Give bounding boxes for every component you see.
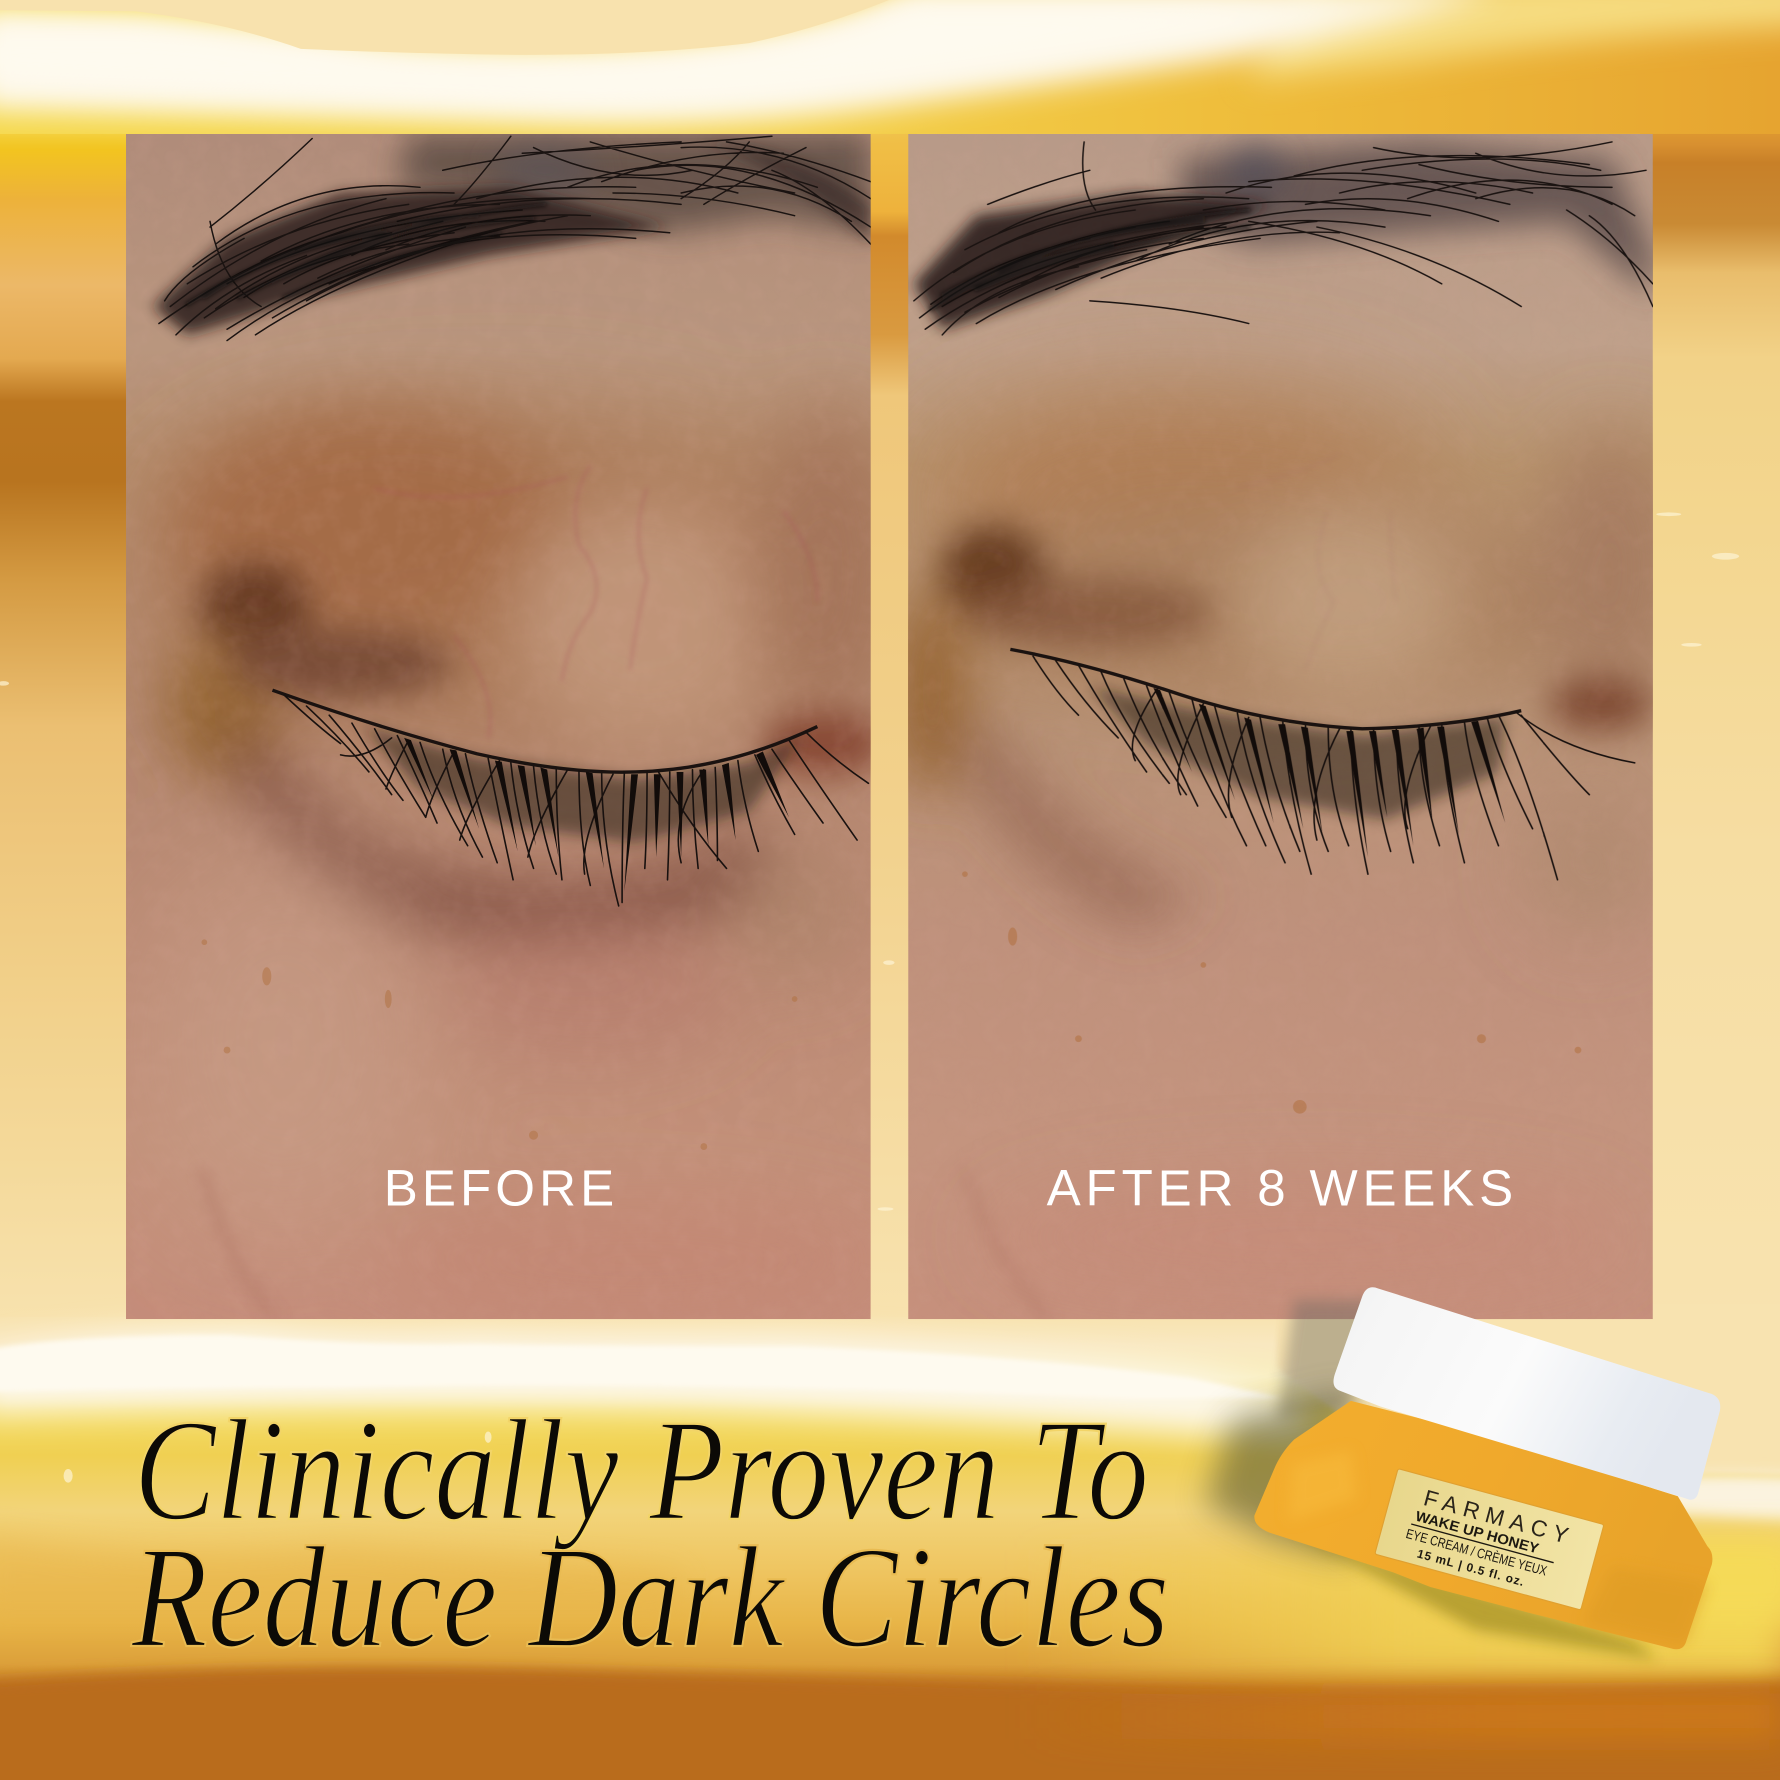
jar body [1254, 1401, 1712, 1649]
jar lid [1333, 1287, 1720, 1500]
film grain [908, 134, 1653, 1319]
film grain [183, 516, 411, 726]
eyebrow [153, 134, 871, 341]
product jar [1254, 1287, 1720, 1649]
skin tone [891, 397, 1680, 1294]
jar label: 15 mL | 0.5 fl. oz. [1416, 1547, 1525, 1589]
before photo panel [126, 134, 897, 1319]
after label: AFTER 8 WEEKS [1047, 1160, 1513, 1217]
before label: BEFORE [384, 1160, 614, 1217]
eyelashes [1010, 649, 1635, 880]
skin tone [132, 364, 871, 1148]
jar label: EYE CREAM / CRÈME YEUX [1404, 1526, 1549, 1579]
title [131, 1391, 1169, 1678]
cheek crease [1038, 1319, 1050, 1320]
jar label: FARMACY [1421, 1484, 1571, 1548]
eyelashes [272, 690, 868, 906]
after photo panel [891, 134, 1680, 1319]
jar shadow [1206, 1300, 1657, 1660]
title: Reduce Dark Circles [131, 1518, 1169, 1678]
cheek crease [202, 1169, 278, 1319]
jar label [1375, 1469, 1604, 1610]
freckles [201, 939, 797, 1150]
veins [562, 497, 648, 678]
title: Clinically Proven To [134, 1391, 1149, 1551]
freckles [962, 871, 1581, 1114]
faint veins [1237, 454, 1396, 670]
eyebrow [914, 142, 1653, 335]
jar label: WAKE UP HONEY [1414, 1509, 1541, 1558]
